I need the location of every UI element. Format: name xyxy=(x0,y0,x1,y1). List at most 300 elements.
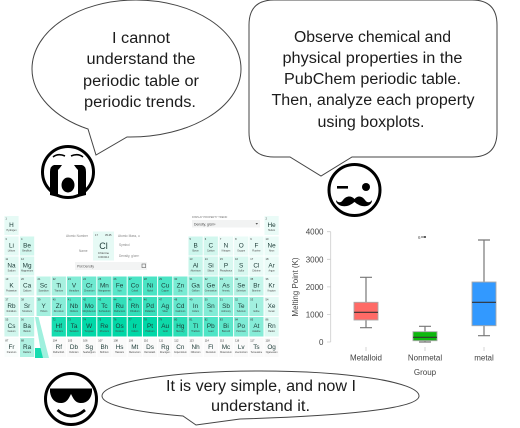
element cells: Ge xyxy=(207,282,216,290)
element cells: Hydrogen xyxy=(7,229,17,232)
element cells: 38 xyxy=(21,298,24,302)
element cells: 47 xyxy=(159,298,163,302)
element cells: Cr xyxy=(86,282,93,290)
element cells: Technetium xyxy=(99,310,110,313)
speech bubble: teacher advice: using boxplots. xyxy=(318,114,424,131)
element cells: Copernicium xyxy=(174,351,187,354)
element cells: Moscovium xyxy=(220,352,232,354)
element cells: Db xyxy=(70,344,79,351)
element cells: Br xyxy=(253,282,260,290)
element cells: 108 xyxy=(114,338,118,342)
element cells: 87 xyxy=(5,338,9,342)
element cells: Dubnium xyxy=(69,352,79,354)
box plot: melting point by group xyxy=(291,228,496,377)
element cells: 86 xyxy=(266,318,269,322)
box: metal xyxy=(472,240,496,362)
element cells: Be xyxy=(23,242,31,250)
element cells: 9 xyxy=(250,237,252,241)
box: metal: metal xyxy=(474,354,494,362)
y axis: 1000 xyxy=(306,310,324,319)
legend key: chlorine card: Symbol xyxy=(119,243,130,247)
element cells: Rutherford. xyxy=(53,351,65,354)
y axis xyxy=(291,228,331,347)
element cells: 44 xyxy=(114,298,117,302)
element cells: Te xyxy=(238,303,245,310)
element cells: Chlorine xyxy=(252,270,261,272)
element cells: 73 xyxy=(68,318,71,322)
element cells: Rhodium xyxy=(130,311,139,313)
element cells: As xyxy=(222,282,230,290)
legend key: chlorine card: Atomic Number xyxy=(66,234,89,238)
element cells: Ne xyxy=(268,242,276,250)
element cells: Se xyxy=(237,282,246,290)
element cells: Cu xyxy=(161,282,170,290)
element cells: Radon xyxy=(268,331,276,333)
element cells: Ds xyxy=(146,344,154,351)
element cells: Ra xyxy=(23,344,32,351)
element cells: Flerovium xyxy=(206,351,216,354)
element cells: Potassium xyxy=(6,290,17,292)
element cells: N xyxy=(224,242,229,250)
element cells: Cd xyxy=(176,303,185,310)
element cells: Ba xyxy=(23,323,31,330)
element cells: 17 xyxy=(250,257,254,261)
element cells: 81 xyxy=(190,318,193,322)
element cells: Gold xyxy=(163,331,168,333)
element cells: Magnesium xyxy=(21,270,33,272)
element cells xyxy=(4,216,279,357)
element cells: Rg xyxy=(161,344,170,351)
element cells: Chromium xyxy=(84,290,95,292)
element cells: 45 xyxy=(129,298,132,302)
element cells: 4 xyxy=(21,237,23,241)
element cells: Beryllium xyxy=(22,250,32,252)
element cells: Iron xyxy=(118,290,122,292)
speech bubble: teacher advice: physical properties in the xyxy=(282,50,462,67)
element cells: Al xyxy=(193,262,198,270)
element cells: 8 xyxy=(235,237,237,241)
legend key: chlorine card: Cl xyxy=(99,241,108,251)
element cells: Na xyxy=(7,262,16,270)
element cells: 32 xyxy=(205,277,208,281)
element cells: Fluorine xyxy=(252,250,261,252)
element cells: Sr xyxy=(24,303,31,310)
property dropdown: Density, g/cm³ xyxy=(194,222,216,226)
element cells: 79 xyxy=(159,318,163,322)
element cells: I xyxy=(256,303,258,310)
element cells: 16 xyxy=(235,257,239,261)
element cells: V xyxy=(72,282,77,290)
element cells: 114 xyxy=(205,338,209,342)
element cells: 42 xyxy=(83,298,87,302)
element cells: Hg xyxy=(176,323,185,330)
speech bubble: student question: periodic trends. xyxy=(84,94,196,111)
element cells: Tellurium xyxy=(237,310,246,313)
element cells: Boron xyxy=(193,250,199,252)
element cells: Lithium xyxy=(8,250,15,252)
element cells: Lv xyxy=(238,344,245,351)
element cells: 48 xyxy=(174,298,178,302)
element cells: Ag xyxy=(161,303,170,310)
y axis: 0 xyxy=(319,338,324,347)
legend key: chlorine card xyxy=(66,232,140,260)
element cells: K xyxy=(9,282,14,290)
element cells: 76 xyxy=(114,318,117,322)
element cells: Hafnium xyxy=(55,331,63,333)
element cells: Pb xyxy=(207,323,215,330)
element cells: Astatine xyxy=(252,330,261,333)
element cells: Roentgen. xyxy=(160,351,171,354)
speech bubble: teacher advice xyxy=(249,0,497,176)
element cells: Zinc xyxy=(178,290,183,292)
element cells: 84 xyxy=(235,318,239,322)
element cells: Au xyxy=(161,323,170,330)
element cells: 50 xyxy=(205,298,208,302)
element cells: 80 xyxy=(174,318,178,322)
element cells: Ga xyxy=(191,282,200,290)
lanthanide and actinide ribbon xyxy=(35,317,49,358)
element cells: Helium xyxy=(268,230,275,232)
element cells: 7 xyxy=(220,237,222,241)
element cells: 22 xyxy=(53,277,56,281)
element cells: Ar xyxy=(268,262,276,270)
element cells: 46 xyxy=(144,298,147,302)
element cells: Vanadium xyxy=(69,290,79,292)
element cells: Kr xyxy=(268,282,276,290)
element cells: 18 xyxy=(266,257,269,261)
element cells: He xyxy=(268,222,276,229)
element cells: O xyxy=(239,242,244,250)
element cells: 31 xyxy=(190,277,193,281)
icon: sunglasses face xyxy=(46,374,96,424)
element cells: Radium xyxy=(23,352,31,354)
element cells: Cs xyxy=(8,323,15,330)
speech bubble: student question xyxy=(32,0,241,155)
element cells: Silver xyxy=(162,310,168,313)
element cells: Rhenium xyxy=(100,331,109,333)
element cells: 29 xyxy=(159,277,163,281)
element cells: Indium xyxy=(192,311,199,313)
element cells: H xyxy=(9,222,14,229)
element cells: 1 xyxy=(5,216,7,220)
element cells: Mercury xyxy=(176,330,185,333)
element cells: 40 xyxy=(53,298,56,302)
box: Nonmetal: 6 xyxy=(418,235,421,240)
element cells: Bh xyxy=(100,344,109,351)
element cells: Livermorium xyxy=(235,351,248,354)
element cells: Fr xyxy=(8,344,15,351)
element cells: Calcium xyxy=(23,290,31,292)
element cells: 13 xyxy=(190,257,193,261)
element cells: Rf xyxy=(56,344,62,351)
element cells: Tantalum xyxy=(69,330,79,333)
element cells: Scandium xyxy=(38,290,49,292)
element cells: 85 xyxy=(250,318,254,322)
x axis title: Group xyxy=(414,368,437,377)
element cells: 55 xyxy=(5,318,9,322)
element cells: 115 xyxy=(220,338,225,342)
property dropdown: DISPLAY PROPERTY TREND xyxy=(192,215,227,219)
element cells: Thallium xyxy=(191,331,200,333)
element cells: Bromine xyxy=(252,290,261,292)
element cells: 27 xyxy=(129,277,132,281)
element cells: Sn xyxy=(207,303,215,310)
element cells: Sulfur xyxy=(238,270,244,272)
element cells: 36 xyxy=(266,277,269,281)
box: Metalloid xyxy=(350,277,382,362)
element cells: In xyxy=(193,303,199,310)
element cells: 53 xyxy=(250,298,254,302)
plot density bar: Plot Density xyxy=(77,264,94,268)
speech bubble: teacher advice: Then, analyze each property xyxy=(272,92,475,109)
element cells: Pt xyxy=(147,323,153,330)
element cells: Ti xyxy=(56,282,61,290)
element cells: Xe xyxy=(268,303,276,310)
element cells: Sodium xyxy=(8,270,15,272)
element cells: Zn xyxy=(177,282,185,290)
element cells: 2 xyxy=(266,216,268,220)
legend key: chlorine card: 0.003214 xyxy=(98,255,109,259)
element cells: Lead xyxy=(208,331,214,333)
element cells: S xyxy=(239,262,243,270)
speech bubble: student understands: It is very simple, and now I xyxy=(166,378,356,395)
property dropdown xyxy=(192,215,260,228)
element cells: 83 xyxy=(220,318,223,322)
element cells: Polonium xyxy=(236,331,246,333)
element cells: Ts xyxy=(253,344,260,351)
element cells: Tennessine xyxy=(251,352,263,354)
element cells: 49 xyxy=(190,298,193,302)
element cells: Copper xyxy=(161,290,169,292)
legend key: chlorine card: Atomic Mass, u xyxy=(118,234,140,238)
element cells: 51 xyxy=(220,298,223,302)
element cells: Bismuth xyxy=(222,330,231,333)
element cells: Bohrium xyxy=(100,351,109,354)
element cells: Krypton xyxy=(268,290,276,292)
element cells: 30 xyxy=(174,277,178,281)
element cells: Os xyxy=(116,323,124,330)
element cells: 77 xyxy=(129,318,132,322)
element cells: Tl xyxy=(193,323,198,330)
element cells: 26 xyxy=(114,277,117,281)
element cells: 82 xyxy=(205,318,208,322)
speech bubble: student question: I cannot xyxy=(112,30,171,47)
element cells: 112 xyxy=(174,338,179,342)
element cells: 14 xyxy=(205,257,208,261)
element cells: Strontium xyxy=(22,310,32,313)
element cells: 23 xyxy=(68,277,71,281)
element cells: F xyxy=(254,242,258,250)
speech bubble: student question: periodic table or xyxy=(83,73,199,90)
element cells: Cesium xyxy=(8,331,15,333)
icon: winking mustache face xyxy=(329,164,380,216)
element cells: Gallium xyxy=(192,290,200,292)
element cells: Po xyxy=(237,323,246,330)
element cells: Silicon xyxy=(207,270,215,272)
element cells: Titanium xyxy=(54,290,63,292)
element cells: 19 xyxy=(5,277,9,281)
element cells: Y xyxy=(41,303,46,310)
element cells: 28 xyxy=(144,277,147,281)
element cells: Sb xyxy=(222,303,230,310)
element cells: Hf xyxy=(56,323,62,330)
element cells: 20 xyxy=(21,277,24,281)
element cells: Nickel xyxy=(147,290,154,292)
element cells: Germanium xyxy=(205,290,217,292)
element cells: 117 xyxy=(250,338,255,342)
y axis: Melting Point (K) xyxy=(291,257,300,317)
element cells: Carbon xyxy=(207,250,215,252)
y axis: 2000 xyxy=(306,283,324,292)
speech bubble: student understands xyxy=(102,371,419,425)
element cells: 43 xyxy=(98,298,102,302)
element cells: Tungsten xyxy=(84,330,95,333)
element cells: 118 xyxy=(266,338,270,342)
element cells: Mg xyxy=(23,262,32,270)
element cells: Mo xyxy=(85,303,94,310)
element cells: 39 xyxy=(38,298,41,302)
element cells: 37 xyxy=(5,298,9,302)
element cells: Oxygen xyxy=(237,250,246,252)
element cells: Tc xyxy=(101,303,108,310)
element cells: Si xyxy=(208,262,214,270)
element cells: 56 xyxy=(21,318,24,322)
element cells: 33 xyxy=(220,277,223,281)
element cells: Aluminum xyxy=(190,270,201,272)
element cells: Rh xyxy=(131,303,139,310)
element cells: Cobalt xyxy=(131,290,138,292)
element cells: Meitnerium xyxy=(129,351,141,354)
element cells: Pd xyxy=(146,303,154,310)
element cells: 105 xyxy=(68,338,73,342)
element cells: Zirconium xyxy=(54,310,64,313)
element cells: Mt xyxy=(131,344,139,351)
element cells: Rb xyxy=(7,303,16,310)
element cells: Platinum xyxy=(146,330,155,333)
element cells: W xyxy=(86,323,93,330)
element cells: Francium xyxy=(7,351,16,354)
speech bubble: teacher advice: Observe chemical and xyxy=(294,29,451,46)
element cells: 116 xyxy=(235,338,240,342)
speech bubble: teacher advice: PubChem periodic table. xyxy=(284,71,461,88)
element cells: Cn xyxy=(176,344,185,351)
element cells: Nitrogen xyxy=(222,250,231,252)
element cells: 15 xyxy=(220,257,223,261)
element cells: Yttrium xyxy=(40,310,47,313)
element cells: 74 xyxy=(83,318,87,322)
element cells: Niobium xyxy=(70,311,78,313)
element cells: Fl xyxy=(208,344,213,351)
element cells: Tin xyxy=(209,311,213,313)
element cells: Palladium xyxy=(145,311,155,313)
element cells: Molybdenum xyxy=(83,311,96,313)
element cells: Re xyxy=(100,323,109,330)
element cells: 5 xyxy=(190,237,192,241)
element cells: 34 xyxy=(235,277,239,281)
element cells: Cl xyxy=(253,262,259,270)
element cells: 111 xyxy=(159,338,164,342)
y axis: 3000 xyxy=(306,255,324,264)
element cells: 88 xyxy=(21,338,24,342)
element cells: Sc xyxy=(40,282,48,290)
element cells: Zr xyxy=(56,303,63,310)
element cells: Seaborgium xyxy=(83,351,95,354)
element cells: Osmium xyxy=(115,331,124,333)
element cells: 106 xyxy=(83,338,88,342)
element cells: 41 xyxy=(68,298,71,302)
element cells: 107 xyxy=(98,338,103,342)
element cells: Nihonium xyxy=(191,352,201,354)
element cells: Sg xyxy=(85,344,94,351)
element cells: Hs xyxy=(116,344,124,351)
legend key: chlorine card: Chlorine xyxy=(98,251,109,255)
periodic table panel xyxy=(4,215,279,358)
element cells: Hassium xyxy=(115,352,124,354)
element cells: Argon xyxy=(269,270,275,272)
element cells: 25 xyxy=(98,277,102,281)
element cells: 54 xyxy=(266,298,269,302)
element cells: 109 xyxy=(129,338,134,342)
element cells: Og xyxy=(267,344,276,351)
element cells: Bi xyxy=(223,323,229,330)
plot density bar xyxy=(75,262,147,270)
element cells: 10 xyxy=(266,237,269,241)
element cells: Iodine xyxy=(253,311,260,313)
element cells: Co xyxy=(131,282,139,290)
element cells: 75 xyxy=(98,318,102,322)
element cells: Darmstadt. xyxy=(144,351,156,354)
element cells: Ru xyxy=(116,303,124,310)
element cells: 113 xyxy=(190,338,194,342)
element cells: Li xyxy=(9,242,14,250)
element cells: 104 xyxy=(53,338,58,342)
element cells: 52 xyxy=(235,298,239,302)
element cells: Iridium xyxy=(131,330,138,333)
element cells: 12 xyxy=(21,257,24,261)
element cells: Ni xyxy=(147,282,153,290)
box: Metalloid: Metalloid xyxy=(350,354,382,362)
element cells: Ir xyxy=(133,323,138,330)
box: Nonmetal: Nonmetal xyxy=(408,354,442,362)
legend key: chlorine card: 17 xyxy=(95,233,98,237)
element cells: Ruthenium xyxy=(114,310,125,313)
legend key: chlorine card: 35.45 xyxy=(105,233,112,237)
element cells: Fe xyxy=(116,282,124,290)
element cells: Antimony xyxy=(221,310,232,313)
element cells: Ta xyxy=(71,323,78,330)
element cells: Rn xyxy=(268,323,276,330)
element cells: Ca xyxy=(23,282,32,290)
element cells: C xyxy=(208,242,213,250)
element cells: Phosphorus xyxy=(220,270,233,272)
element cells: P xyxy=(224,262,228,270)
element cells: 6 xyxy=(205,237,207,241)
element cells: Rubidium xyxy=(7,311,16,313)
element cells: 11 xyxy=(5,257,9,261)
element cells: Nb xyxy=(70,303,79,310)
element cells: 78 xyxy=(144,318,147,322)
element cells: At xyxy=(253,323,260,330)
speech bubble: student question: understand the xyxy=(86,51,196,68)
y axis: 4000 xyxy=(306,228,324,237)
element cells: Nh xyxy=(192,344,200,351)
element cells: Xenon xyxy=(268,311,276,313)
element cells: 24 xyxy=(83,277,87,281)
legend key: chlorine card: Density, g/cm³ xyxy=(119,254,139,258)
element cells: Barium xyxy=(23,330,31,333)
element cells: Oganesson xyxy=(266,352,278,354)
element cells: B xyxy=(193,242,198,250)
